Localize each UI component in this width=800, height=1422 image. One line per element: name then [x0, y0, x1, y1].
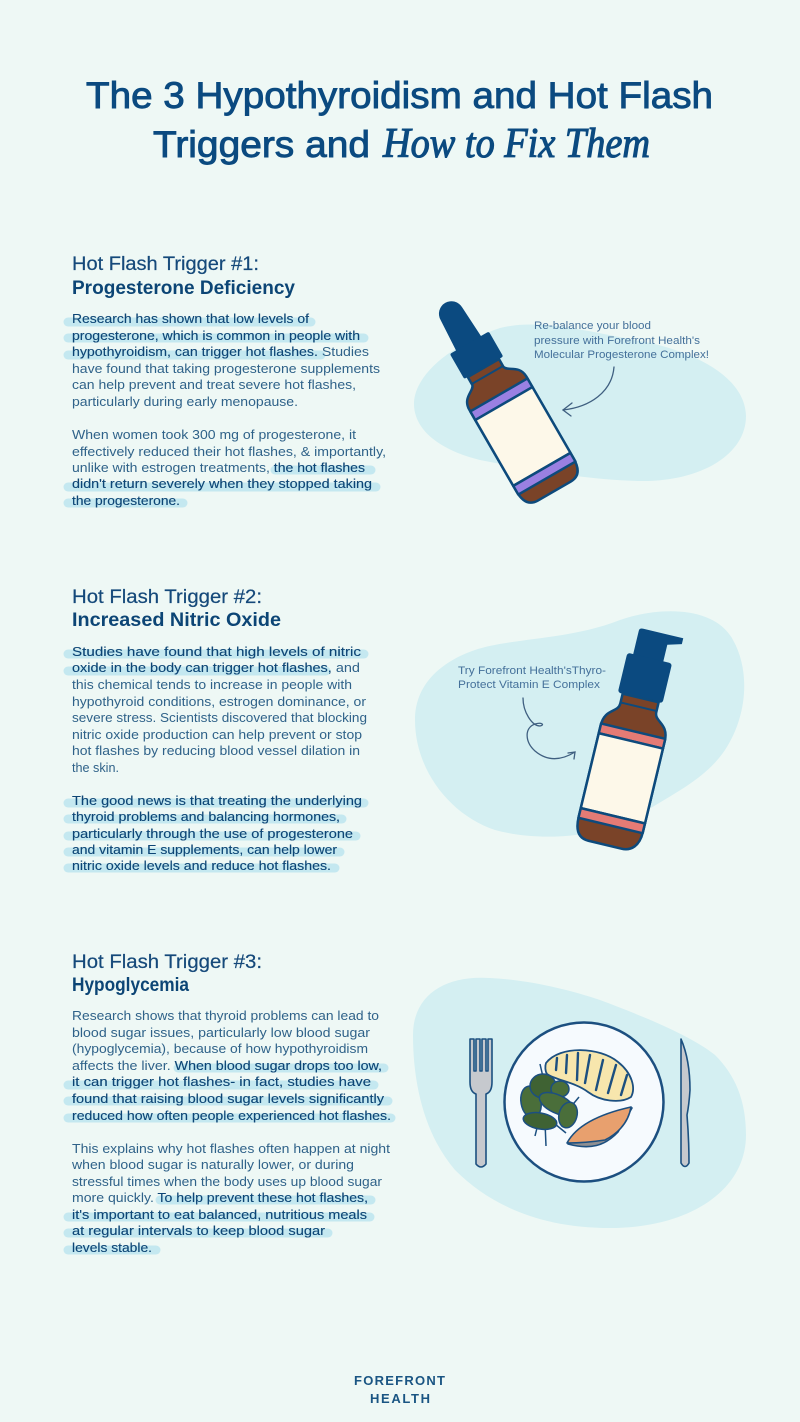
panel: trigger 2 text — [68, 587, 367, 873]
callout: bottle 1 — [534, 320, 709, 361]
panel: trigger 3 illustration — [413, 978, 746, 1228]
text block: trigger 1 body: Research has shown that low levels of — [72, 311, 309, 326]
text block: trigger 3 body: it can trigger hot flashes- in fact, studies have — [72, 1074, 371, 1089]
text block: trigger 2 body: nitric oxide production can help prevent or stop — [72, 727, 362, 742]
panel: trigger 2 illustration — [415, 611, 744, 853]
text block: trigger 3 body: when blood sugar is naturally lower, or during — [71, 1157, 354, 1172]
heading: trigger 3 — [72, 952, 262, 996]
icon: plate — [504, 1022, 664, 1182]
icon: pump bottle coral — [574, 624, 689, 853]
text block: trigger 3 body: affects the liver. When blood sugar drops too low, — [72, 1058, 382, 1073]
text block: trigger 2 body: Studies have found that high levels of nitric — [72, 644, 362, 659]
callout: bottle 1: Re-balance your blood — [534, 320, 651, 332]
callout: bottle 1: Molecular Progesterone Complex! — [534, 349, 709, 361]
logo: FOREFRONT — [354, 1373, 445, 1388]
text block: trigger 2 body: oxide in the body can trigger hot flashes, and — [72, 660, 360, 675]
text block: trigger 3 body — [71, 1008, 391, 1255]
highlights: trigger 1 — [68, 322, 376, 503]
text block: trigger 2 body: thyroid problems and balancing hormones, — [72, 809, 340, 824]
text block: trigger 1 body: hypothyroidism, can trigger hot flashes. Studies — [72, 344, 370, 359]
panel: trigger 1 text — [68, 254, 386, 508]
callout: bottle 2: Try Forefront Health'sThyro- — [458, 665, 606, 677]
title: The 3 Hypothyroidism and Hot Flash — [86, 75, 713, 116]
text block: trigger 1 body: particularly during early menopause. — [72, 394, 298, 409]
text block: trigger 2 body: this chemical tends to increase in people with — [72, 677, 352, 692]
callout: bottle 1: pressure with Forefront Health's — [534, 335, 701, 347]
text block: trigger 3 body: reduced how often people experienced hot flashes. — [72, 1108, 391, 1123]
blob 1 — [414, 325, 746, 481]
title: Triggers and — [153, 124, 370, 165]
text block: trigger 1 body: effectively reduced their hot flashes, & importantly, — [72, 444, 386, 459]
text block: trigger 2 body: and vitamin E supplements, can help lower — [72, 842, 338, 857]
text block: trigger 1 body — [72, 311, 386, 508]
blob 3 — [413, 978, 746, 1228]
heading: trigger 2 — [72, 587, 281, 631]
text block: trigger 1 body: have found that taking progesterone supplements — [72, 361, 381, 376]
text block: trigger 1 body: didn't return severely when they stopped taking — [72, 476, 372, 491]
title — [86, 75, 713, 167]
text block: trigger 1 body: progesterone, which is common in people with — [72, 328, 360, 343]
logo — [354, 1373, 445, 1406]
text block: trigger 2 body: the skin. — [72, 760, 119, 775]
text block: trigger 3 body: levels stable. — [72, 1240, 152, 1255]
arrow: callout 2 to bottle — [523, 698, 575, 759]
text block: trigger 3 body: This explains why hot flashes often happen at night — [72, 1141, 390, 1156]
heading: trigger 2: Hot Flash Trigger #2: — [72, 587, 262, 608]
icon: dropper bottle purple — [417, 286, 583, 508]
panel: trigger 3 text — [68, 952, 391, 1255]
panel: trigger 1 illustration — [414, 286, 746, 508]
text block: trigger 2 body — [72, 644, 367, 873]
heading: trigger 1: Progesterone Deficiency — [72, 278, 295, 299]
highlights: trigger 3 — [68, 1068, 391, 1250]
text block: trigger 1 body: the progesterone. — [72, 493, 180, 508]
text block: trigger 2 body: hypothyroid conditions, estrogen dominance, or — [72, 694, 367, 709]
text block: trigger 3 body: at regular intervals to keep blood sugar — [72, 1223, 326, 1238]
title: How to Fix Them — [382, 121, 650, 167]
blob 2 — [415, 611, 744, 837]
text block: trigger 2 body: hot flashes by reducing blood vessel dilation in — [72, 743, 360, 758]
heading: trigger 2: Increased Nitric Oxide — [72, 610, 281, 631]
text block: trigger 3 body: blood sugar issues, particularly low blood sugar — [72, 1025, 371, 1040]
text block: trigger 3 body: Research shows that thyroid problems can lead to — [72, 1008, 379, 1023]
heading: trigger 1 — [72, 254, 295, 299]
text block: trigger 1 body: unlike with estrogen treatments, the hot flashes — [72, 460, 366, 475]
icon: spinach — [518, 1064, 580, 1146]
callout: bottle 2: Protect Vitamin E Complex — [458, 679, 601, 691]
logo: HEALTH — [370, 1391, 430, 1406]
text block: trigger 3 body: found that raising blood sugar levels significantly — [72, 1091, 385, 1106]
callout: bottle 2 — [458, 665, 606, 691]
text block: trigger 3 body: more quickly. To help prevent these hot flashes, — [72, 1190, 368, 1205]
text block: trigger 3 body: (hypoglycemia), because of how hypothyroidism — [72, 1041, 368, 1056]
icon: chicken — [545, 1050, 633, 1101]
text block: trigger 1 body: can help prevent and treat severe hot flashes, — [72, 377, 356, 392]
text block: trigger 2 body: nitric oxide levels and reduce hot flashes. — [72, 858, 331, 873]
icon: sweet potato — [567, 1107, 632, 1147]
highlights: trigger 2 — [68, 654, 364, 868]
icon: fork — [470, 1039, 492, 1167]
arrow: callout 1 to bottle — [563, 367, 614, 416]
heading: trigger 3: Hypoglycemia — [72, 975, 189, 996]
text block: trigger 1 body: When women took 300 mg of progesterone, it — [72, 427, 356, 442]
text block: trigger 3 body: it's important to eat balanced, nutritious meals — [72, 1207, 368, 1222]
text block: trigger 2 body: particularly through the use of progesterone — [72, 826, 353, 841]
icon: knife — [681, 1039, 690, 1166]
heading: trigger 1: Hot Flash Trigger #1: — [72, 254, 259, 275]
text block: trigger 2 body: severe stress. Scientists discovered that blocking — [72, 710, 367, 725]
text block: trigger 2 body: The good news is that treating the underlying — [72, 793, 362, 808]
heading: trigger 3: Hot Flash Trigger #3: — [72, 952, 262, 973]
text block: trigger 3 body: stressful times when the body uses up blood sugar — [72, 1174, 383, 1189]
